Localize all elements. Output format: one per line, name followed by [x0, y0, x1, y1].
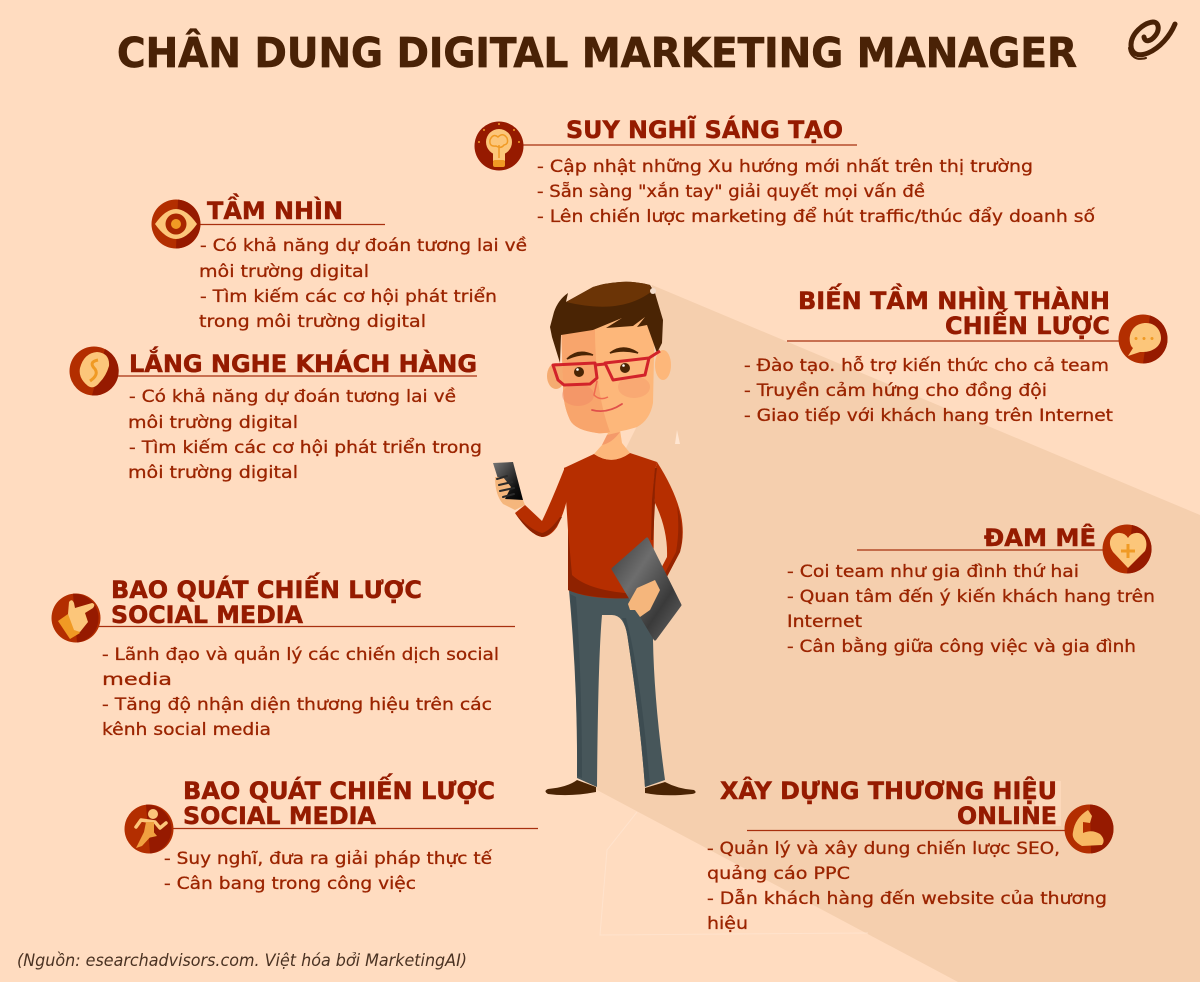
shadow glint	[675, 430, 680, 444]
figure: man with phone and folder	[493, 282, 696, 795]
body text: - Có khả năng dự đoán tương lai về	[200, 235, 527, 256]
body text: kênh social media	[102, 720, 271, 740]
folder	[613, 539, 680, 639]
body text: hiệu	[707, 914, 748, 934]
heading	[798, 282, 1110, 340]
body text: trong môi trường digital	[199, 312, 426, 332]
heading: CHIẾN LƯỢC	[945, 307, 1110, 340]
icon: logo swirl	[1129, 22, 1175, 59]
source note: (Nguồn: esearchadvisors.com. Việt hóa bởi MarketingAI)	[17, 950, 467, 971]
body text: - Coi team như gia đình thứ hai	[787, 562, 1079, 582]
body text: môi trường digital	[128, 413, 298, 433]
body text: - Lên chiến lược marketing để hút traffic/thúc đẩy doanh số	[537, 206, 1096, 227]
body text: - Cập nhật những Xu hướng mới nhất trên thị trường	[537, 156, 1033, 177]
nose	[594, 381, 608, 399]
icon: lightbulb with brain	[474, 122, 524, 170]
heading: SOCIAL MEDIA	[111, 601, 303, 629]
body text	[787, 562, 1155, 657]
body text: media	[102, 670, 172, 690]
icon: runner	[124, 804, 174, 854]
body text: - Quản lý và xây dung chiến lược SEO,	[707, 838, 1060, 859]
section: Đam mê	[787, 523, 1155, 657]
hair	[550, 282, 663, 363]
eyes	[574, 367, 584, 377]
heading: BIẾN TẦM NHÌN THÀNH	[798, 282, 1110, 315]
body text: môi trường digital	[128, 463, 298, 483]
trousers	[569, 590, 665, 787]
body text: - Lãnh đạo và quản lý các chiến dịch social	[102, 644, 499, 665]
body text: - Tìm kiếm các cơ hội phát triển	[200, 286, 497, 307]
icon: eye	[152, 200, 200, 248]
icon: flexed arm	[1064, 804, 1114, 854]
sweater torso	[564, 453, 657, 598]
heading: SUY NGHĨ SÁNG TẠO	[566, 115, 843, 144]
heading: TẦM NHÌN	[207, 192, 343, 225]
body text	[102, 644, 499, 740]
icon: speech bubble	[1118, 314, 1168, 364]
left shoe	[546, 780, 596, 795]
body text	[707, 838, 1107, 934]
glasses	[553, 351, 660, 385]
body text	[128, 386, 482, 483]
mouth	[592, 404, 622, 411]
body text: - Giao tiếp với khách hang trên Internet	[744, 405, 1113, 426]
body text: quảng cáo PPC	[707, 864, 850, 884]
face	[561, 310, 655, 433]
heading	[720, 775, 1057, 830]
body text: - Dẫn khách hàng đến website của thương	[707, 888, 1107, 909]
title: CHÂN DUNG DIGITAL MARKETING MANAGER	[117, 29, 1077, 77]
body text	[164, 848, 493, 894]
body text: - Cân bằng giữa công việc và gia đình	[787, 636, 1136, 657]
body text: - Cân bang trong công việc	[164, 874, 416, 894]
body text: - Quan tâm đến ý kiến khách hang trên	[787, 586, 1155, 607]
icon: pointing hand	[52, 594, 100, 642]
heading: BAO QUÁT CHIẾN LƯỢC	[183, 772, 495, 805]
right shoe	[645, 782, 696, 795]
body text	[744, 355, 1113, 426]
heading: ĐAM MÊ	[984, 523, 1096, 552]
body text: - Tìm kiếm các cơ hội phát triển trong	[129, 437, 482, 458]
left arm	[515, 467, 569, 537]
body text: - Sẵn sàng "xắn tay" giải quyết mọi vấn đề	[537, 181, 925, 202]
heading: XÂY DỰNG THƯƠNG HIỆU	[720, 775, 1057, 805]
section: Bao quát chiến lược social media (1)	[52, 571, 515, 740]
icon: ear	[70, 346, 119, 396]
heading: ONLINE	[957, 802, 1057, 830]
heading	[183, 772, 495, 830]
body text: - Có khả năng dự đoán tương lai về	[129, 386, 456, 407]
section: Biến tầm nhìn thành chiến lược	[744, 282, 1168, 426]
body text: - Đào tạo. hỗ trợ kiến thức cho cả team	[744, 355, 1109, 376]
eyebrows	[567, 348, 638, 359]
body text: - Tăng độ nhận diện thương hiệu trên các	[102, 695, 492, 715]
phone	[493, 462, 523, 501]
right arm	[654, 462, 683, 590]
body text: Internet	[787, 612, 862, 632]
cheeks	[562, 384, 594, 406]
long shadow behind figure	[585, 285, 1200, 982]
body text	[537, 156, 1096, 227]
heading: BAO QUÁT CHIẾN LƯỢC	[111, 571, 422, 604]
heading: SOCIAL MEDIA	[183, 802, 376, 830]
body text: môi trường digital	[199, 262, 369, 282]
folder hand	[628, 580, 660, 617]
body text: - Suy nghĩ, đưa ra giải pháp thực tế	[164, 848, 493, 869]
body text	[199, 235, 527, 332]
section: Lắng nghe khách hàng	[70, 345, 482, 483]
body text: - Truyền cảm hứng cho đồng đội	[744, 380, 1047, 401]
heading	[111, 571, 422, 629]
section: Bao quát chiến lược social media (2)	[124, 772, 538, 894]
section: Xây dựng thương hiệu online	[707, 775, 1114, 934]
section: Tầm nhìn	[152, 192, 527, 332]
section: Suy nghĩ sáng tạo	[474, 115, 1096, 227]
heading: LẮNG NGHE KHÁCH HÀNG	[129, 345, 477, 378]
ears	[547, 363, 565, 389]
neck	[594, 430, 630, 460]
icon: heart with plus	[1102, 524, 1152, 574]
phone hand	[495, 477, 525, 510]
